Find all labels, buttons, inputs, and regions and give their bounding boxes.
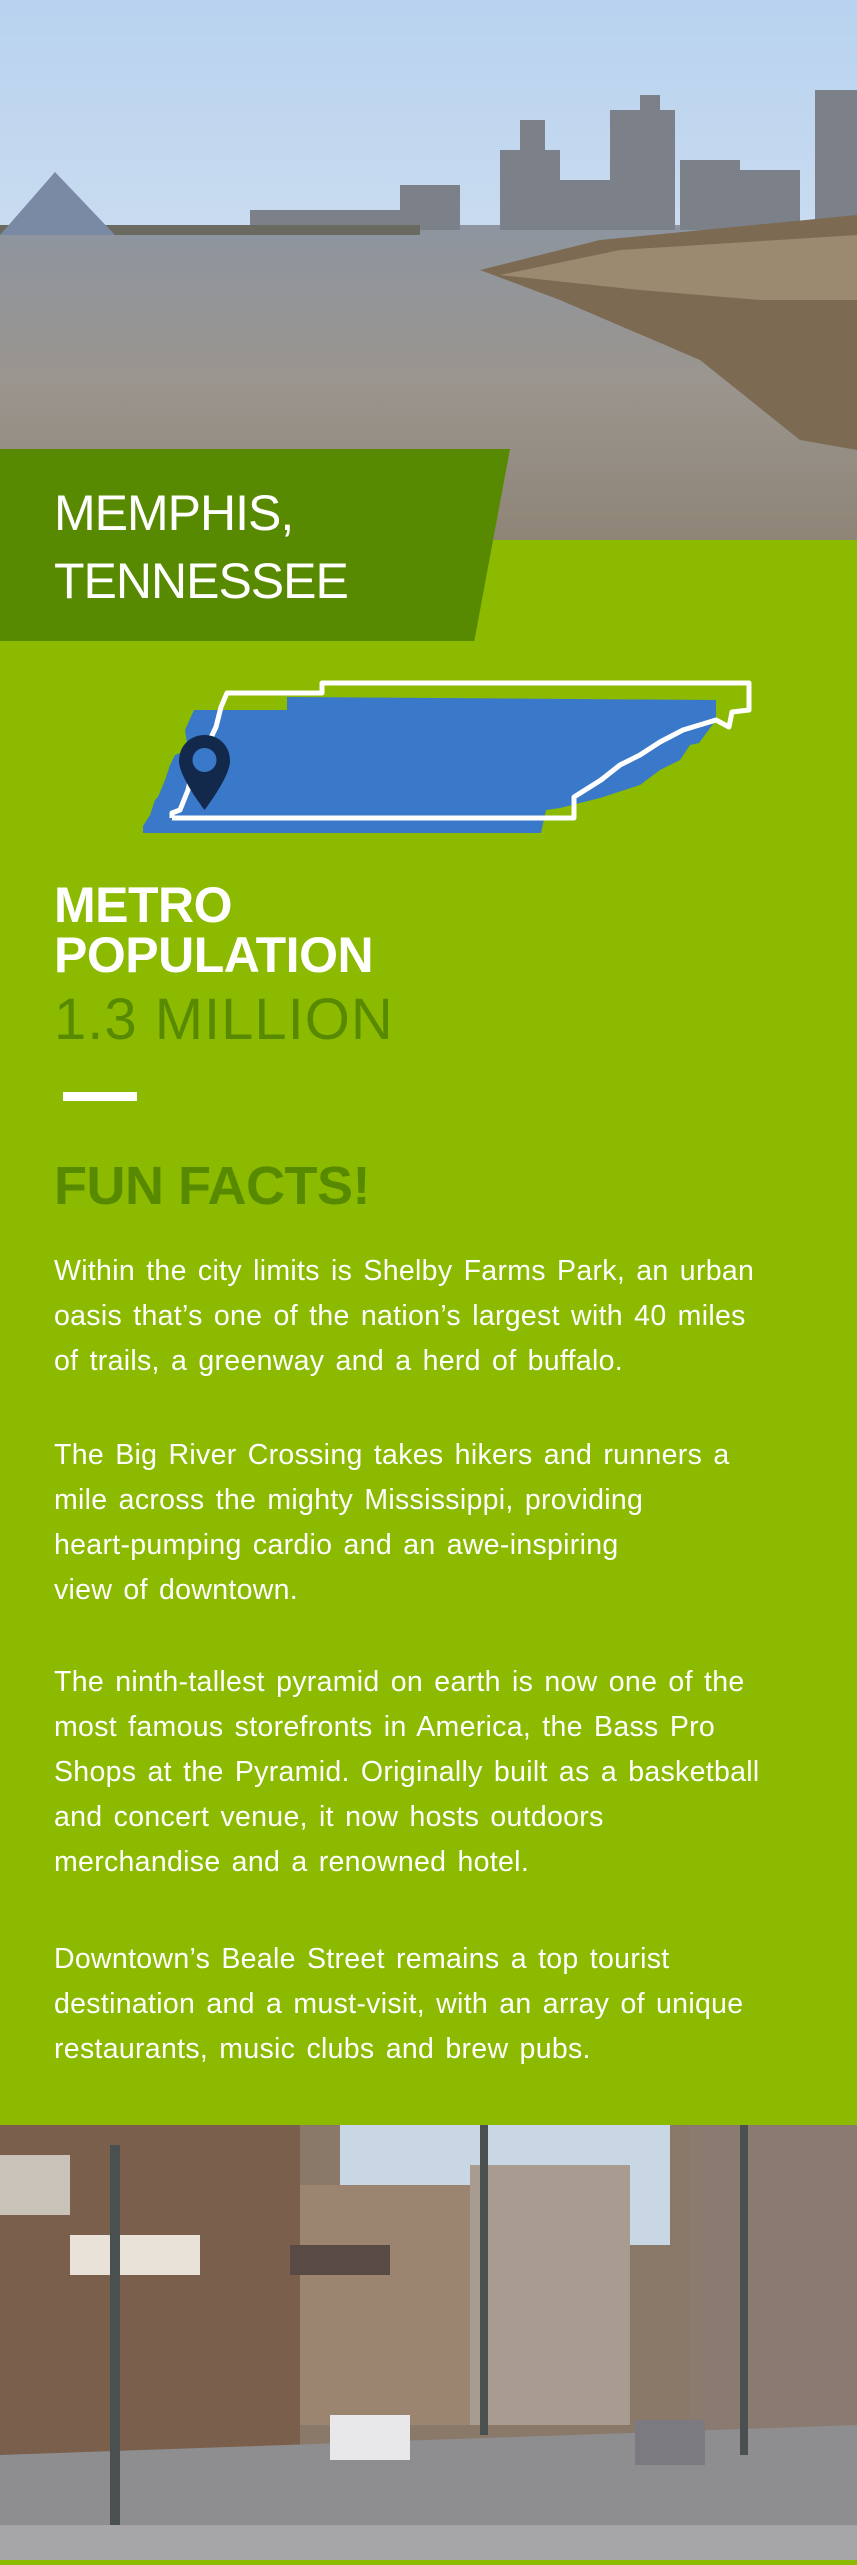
fact 4 bbox=[54, 1943, 743, 2065]
fact 1: of trails, a greenway and a herd of buffalo. bbox=[54, 1345, 623, 1377]
fact 4: destination and a must-visit, with an array of unique bbox=[54, 1988, 743, 2020]
population number: 1.3 MILLION bbox=[54, 987, 394, 1052]
fact 1 bbox=[54, 1255, 754, 1377]
title banner bbox=[0, 449, 510, 641]
map: Tennessee bbox=[143, 680, 752, 833]
fact 4: Downtown’s Beale Street remains a top tourist bbox=[54, 1943, 670, 1975]
fact 3: The ninth-tallest pyramid on earth is now one of the bbox=[54, 1666, 745, 1698]
fact 1: Within the city limits is Shelby Farms Park, an urban bbox=[54, 1255, 754, 1287]
fact 4: restaurants, music clubs and brew pubs. bbox=[54, 2033, 591, 2065]
metro population heading: POPULATION bbox=[54, 927, 373, 983]
fact 1: oasis that’s one of the nation’s largest with 40 miles bbox=[54, 1300, 746, 1332]
fact 3: merchandise and a renowned hotel. bbox=[54, 1846, 529, 1878]
fun facts heading: FUN FACTS! bbox=[54, 1156, 370, 1216]
icon: map pin bbox=[179, 735, 230, 810]
title text: MEMPHIS, bbox=[54, 485, 293, 541]
fact 2: heart-pumping cardio and an awe-inspiring bbox=[54, 1529, 619, 1561]
fact 3: and concert venue, it now hosts outdoors bbox=[54, 1801, 604, 1833]
fact 3: most famous storefronts in America, the Bass Pro bbox=[54, 1711, 715, 1743]
fact 2: view of downtown. bbox=[54, 1574, 298, 1606]
divider dash bbox=[63, 1092, 137, 1101]
title text: TENNESSEE bbox=[54, 553, 348, 609]
fact 2 bbox=[54, 1439, 730, 1606]
title text bbox=[55, 495, 347, 598]
metro population heading bbox=[54, 877, 373, 983]
bottom photo: Beale Street bbox=[0, 2125, 857, 2560]
fact 2: The Big River Crossing takes hikers and runners a bbox=[54, 1439, 729, 1471]
top photo: Memphis skyline and river bbox=[0, 0, 857, 540]
metro population heading: METRO bbox=[54, 877, 232, 933]
fact 3 bbox=[54, 1666, 760, 1878]
fact 3: Shops at the Pyramid. Originally built as a basketball bbox=[54, 1756, 760, 1788]
fact 2: mile across the mighty Mississippi, providing bbox=[54, 1484, 643, 1516]
